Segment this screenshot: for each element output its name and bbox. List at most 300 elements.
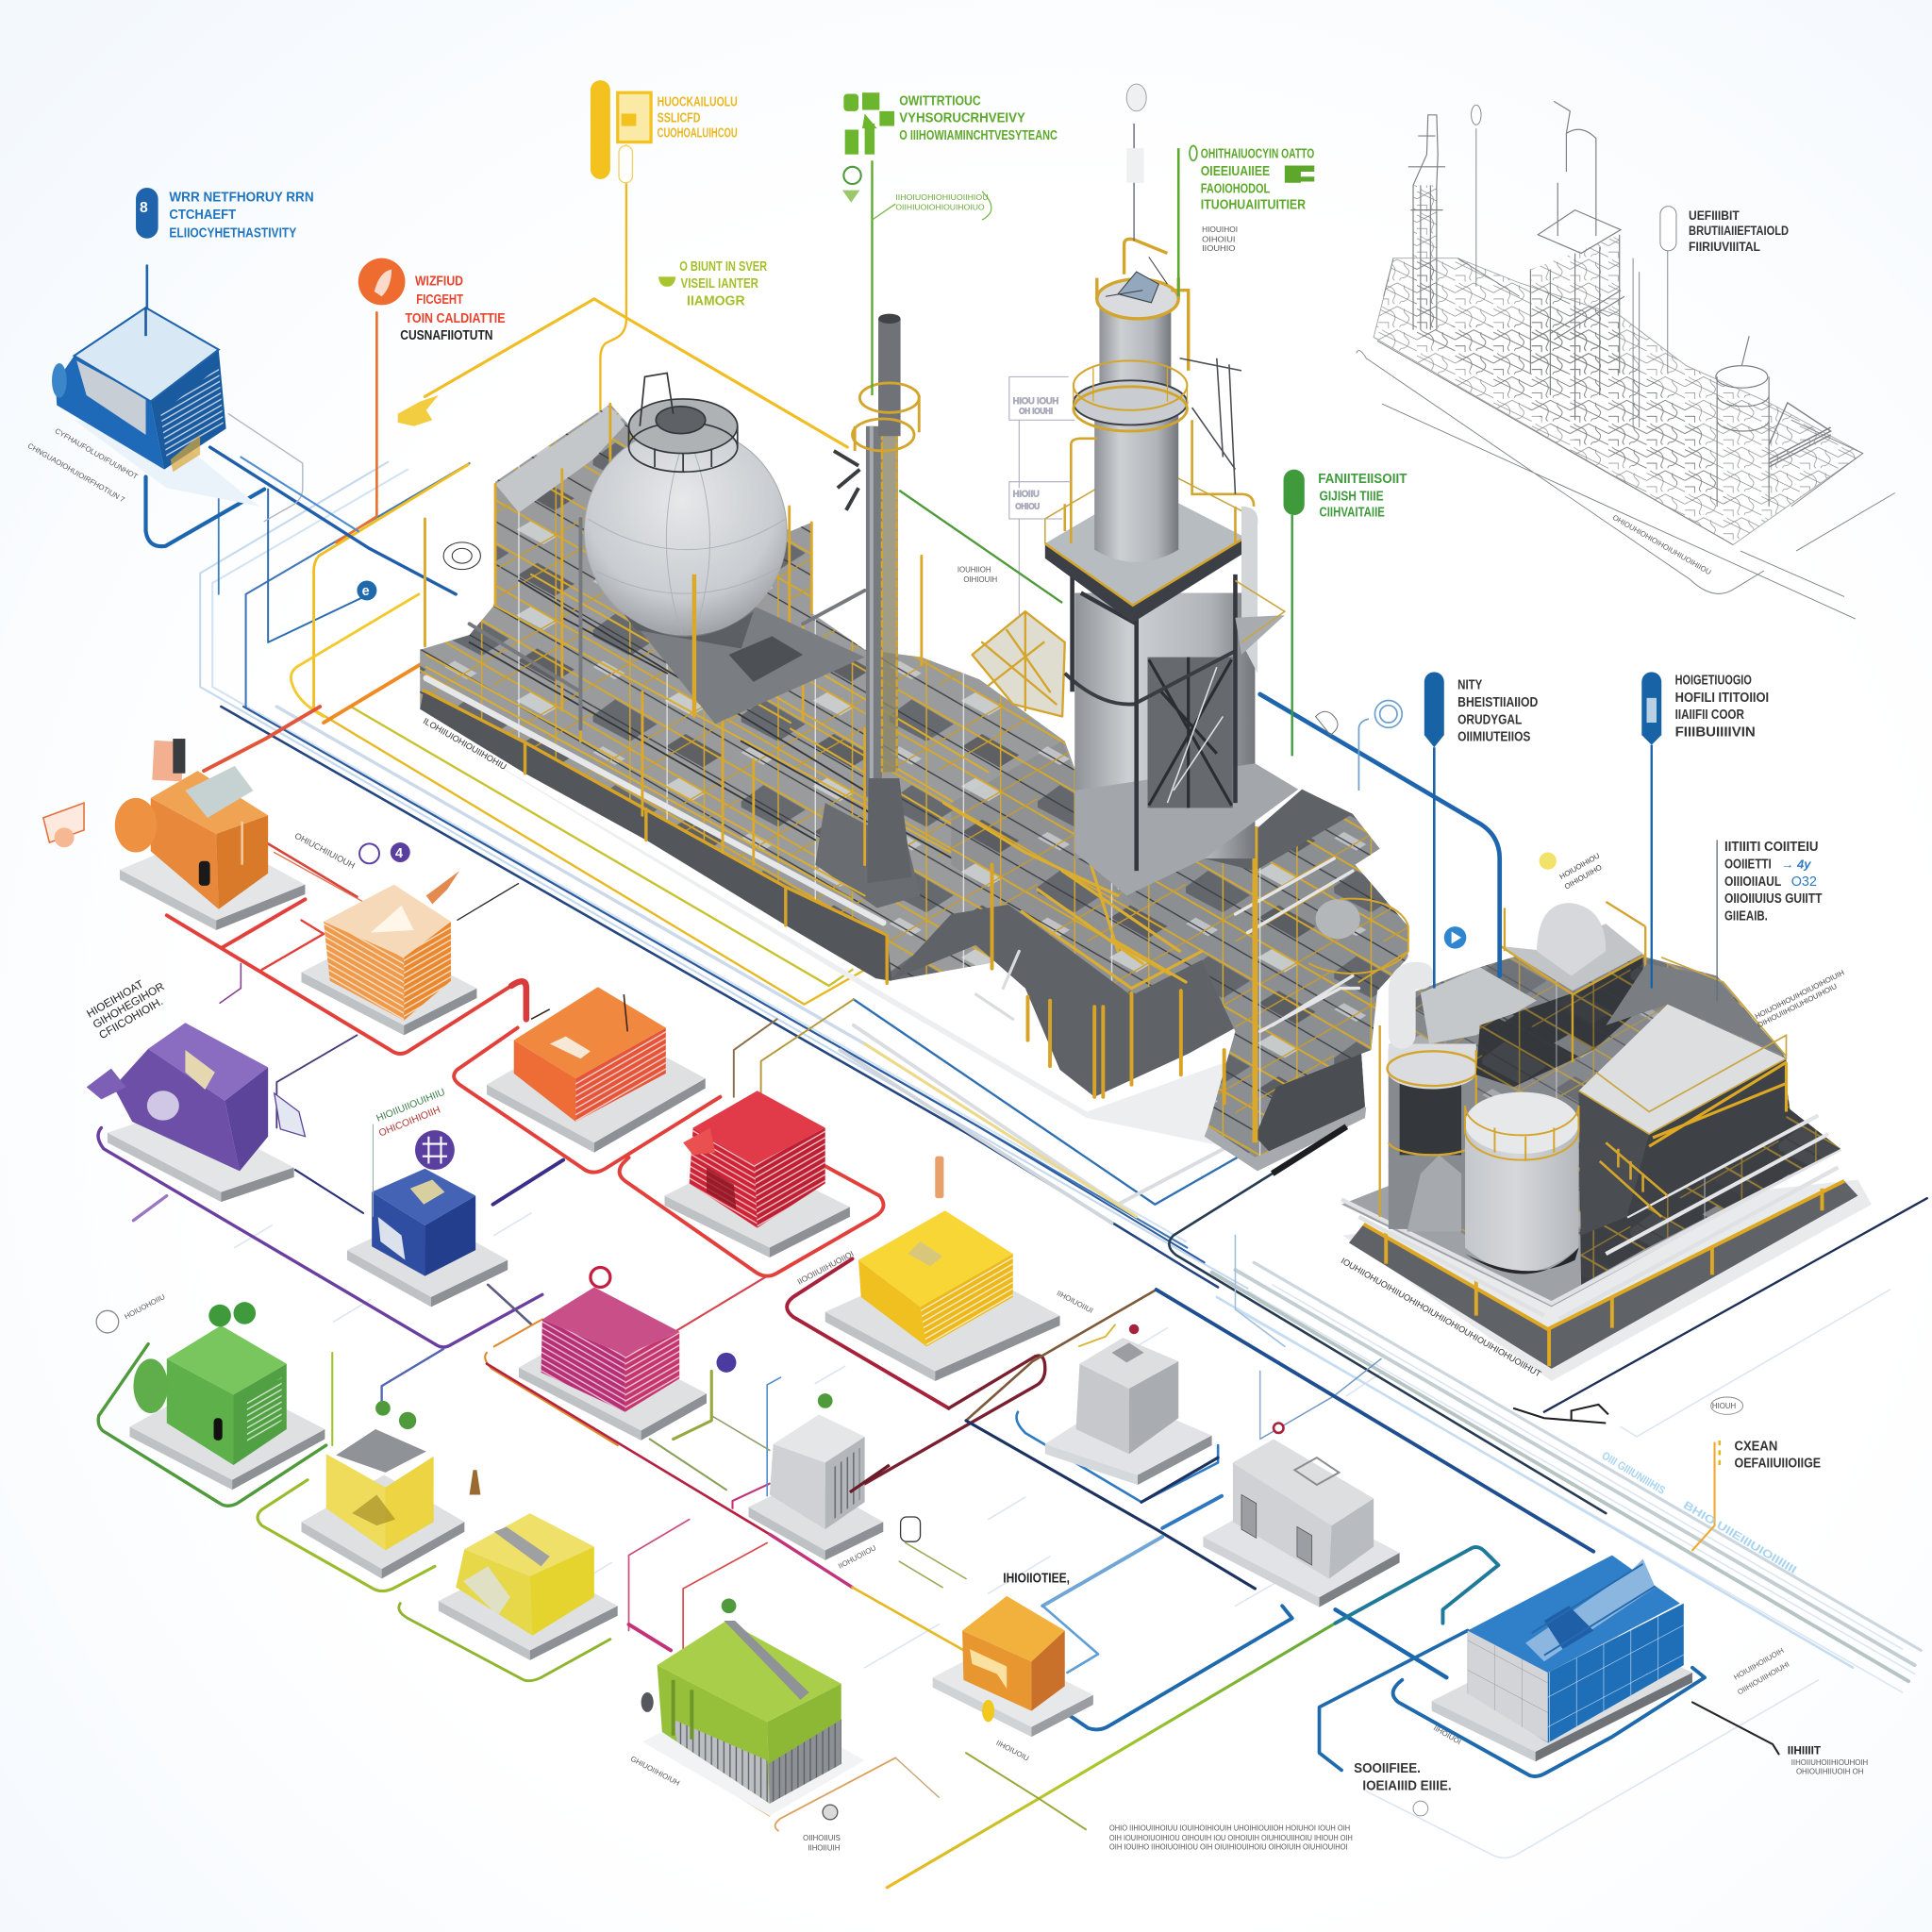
right unit: roof rails — [1578, 958, 1786, 1134]
icon: blue pill — [136, 188, 158, 239]
caption: near stack: OIHIOUIH — [963, 575, 997, 584]
icon: orange circle — [358, 258, 406, 305]
icon: pill square — [1647, 698, 1657, 723]
callout: blue top left — [136, 188, 314, 241]
pipes: upper yellow routes — [291, 146, 847, 723]
plant: upright posts — [425, 404, 922, 865]
flare stack — [834, 314, 919, 883]
machine: grey unit 3 — [1203, 1424, 1400, 1607]
text: blue scribble — [1781, 858, 1817, 890]
text: green block — [899, 92, 1058, 143]
tower: top ring — [1097, 239, 1189, 371]
text: blue pill block: BHEISTIIAIIOD — [1457, 694, 1538, 710]
text: tower block: OIEEIUAIIEE — [1201, 163, 1270, 179]
text: controls block: IITIIITI COIITEIU — [1724, 839, 1819, 855]
icon: green badges — [375, 1401, 416, 1429]
callout: controls text — [1717, 839, 1823, 1001]
wireframe: tank — [1716, 336, 1769, 507]
text: tower block — [1201, 146, 1314, 212]
diagonal blue labels: BHIO UIIEIIIUIOIIIIIII — [1681, 1499, 1798, 1576]
caption: purple unit: HIOEIHIOAT — [85, 978, 145, 1021]
sphere: skirt — [624, 611, 754, 648]
right unit: dark base — [1349, 1181, 1857, 1369]
caption: purple unit: CFIICOHIOIH. — [97, 995, 165, 1041]
caption: yellow unit: IIOOIIUIIHUOIIOI — [795, 1249, 856, 1287]
text: detail: IOEIAIIID EIIIE. — [1362, 1777, 1452, 1793]
icon: blue e badge — [357, 580, 376, 600]
text: controls block: OIIIOIIAUL — [1724, 874, 1781, 890]
caption: near stack: IOUHIIOH — [958, 565, 991, 574]
plant: long rails — [426, 531, 1062, 899]
right unit: white tank — [1465, 1126, 1578, 1273]
stack: cap — [878, 314, 901, 324]
callout: orange — [358, 258, 506, 343]
machine: orange unit 1 — [43, 739, 305, 930]
icon: black bracket arrow — [1513, 1405, 1608, 1424]
tower: side pipe — [1071, 420, 1254, 543]
right unit: roof side — [1627, 1058, 1786, 1217]
text: blue block: CTCHAEFT — [169, 207, 237, 223]
label: right small: IIHIIIIT — [1788, 1744, 1822, 1757]
sphere: front post — [692, 575, 696, 716]
riser — [1651, 745, 1653, 989]
text: yellow block — [658, 94, 738, 141]
icon: green blocks — [843, 92, 894, 155]
icon: yellow chevron — [398, 395, 439, 426]
icon: green bars — [1285, 165, 1314, 183]
text: tower block: ITUOHUAIITUITIER — [1201, 196, 1306, 212]
right unit: tank top — [1465, 1092, 1578, 1154]
text: green block: O IIIHOWIAMINCHTVESYTEANC — [899, 127, 1058, 143]
icon: sketch stamp — [1413, 1801, 1428, 1816]
mast — [1133, 124, 1135, 241]
machine: navy unit — [347, 1088, 508, 1307]
caption: grey unit 2: IIHOIUOIIUI — [1056, 1289, 1094, 1315]
wireframe: outer base — [1357, 351, 1895, 619]
plant: grey pipes — [470, 519, 865, 729]
text: blue block — [169, 189, 314, 241]
tower: deck edge — [1045, 538, 1245, 623]
plant: left lattice — [420, 404, 1087, 981]
plant: scaffold yellow — [943, 803, 1202, 989]
tower: left callout boxes: OH IOUHI — [1019, 408, 1053, 416]
wireframe: vertical risers — [1633, 258, 1640, 427]
plant: lower hull dark patch — [815, 803, 921, 908]
icon: green circle — [843, 167, 861, 184]
text: blue pill block — [1457, 677, 1538, 745]
right unit: backing structure — [1389, 924, 1786, 1235]
callout: tower green — [1178, 146, 1314, 296]
right unit: yellow beams — [1364, 1181, 1844, 1366]
riser — [1716, 840, 1718, 1001]
antenna above tower — [1126, 84, 1146, 241]
tower: deck rail — [1045, 460, 1245, 543]
callout: bottom text — [1354, 1760, 1452, 1816]
stack: ladder rails — [882, 432, 897, 772]
big blue riser — [1260, 694, 1500, 975]
right unit: deck — [1341, 1109, 1840, 1307]
icon: maroon badge — [1274, 1424, 1284, 1433]
icon: yellow block — [622, 113, 636, 126]
icon: blue pill — [1424, 672, 1444, 747]
icon: red badge — [591, 1268, 610, 1287]
wireframe: callout tube — [1660, 207, 1676, 251]
machine: orange cube — [933, 1570, 1093, 1763]
connector: green stack to tower — [899, 491, 1062, 603]
plant: right deck top — [1205, 790, 1353, 871]
right unit: roof — [1578, 1005, 1786, 1134]
machine: magenta unit — [519, 1268, 736, 1441]
wireframe: main tower — [1530, 101, 1621, 420]
caption: purple unit: GIHOHEGIHOR — [91, 980, 166, 1031]
plant: scaffold mesh — [973, 611, 1065, 716]
caption: plant: ILOHIIUIOHIOUIIHOHIU — [422, 716, 508, 772]
green riser — [1177, 148, 1179, 296]
text: tower block: OHITHAIUOCYIN OATTO — [1201, 146, 1314, 162]
callout: yellow green — [658, 258, 767, 308]
wireframe: callout stem — [1667, 251, 1669, 373]
caption: orange cube: IIHOIUOIU — [994, 1739, 1030, 1763]
callout: blue pill middle — [1424, 672, 1538, 989]
text: blue pill block: NITY — [1457, 677, 1482, 693]
callout: yellow top — [591, 80, 738, 183]
plant: white walkway band — [426, 678, 883, 923]
sphere: body — [584, 427, 787, 635]
text: lime block: VISEIL IANTER — [681, 275, 758, 291]
stack: upper pipe — [878, 319, 901, 436]
caption: lime unit: GHIUOIIHIOIUH — [629, 1755, 681, 1788]
icon: indigo badge — [716, 1353, 736, 1373]
icon: sketch bag — [901, 1517, 921, 1541]
pipes: maroon and blue network — [850, 1290, 1779, 1776]
icon: sketch badge — [823, 1805, 838, 1820]
right process unit — [1273, 902, 1872, 1381]
right unit: upper deck frame — [1501, 902, 1645, 1062]
plant: dark rails — [470, 580, 963, 865]
plant: right wing body — [1118, 790, 1408, 1158]
tower: deck — [1045, 486, 1245, 606]
icon: orange marker — [935, 1157, 943, 1198]
text: right pill block: IIAIIFII COOR — [1675, 707, 1744, 723]
right unit: tank shadow — [1465, 1248, 1578, 1274]
right unit: roof left side — [1578, 1091, 1649, 1235]
text: side block — [1318, 471, 1407, 520]
right unit: bent white pipe — [1402, 975, 1421, 1035]
wireframe: body overlay — [1408, 321, 1729, 507]
icon: yellow pill — [591, 80, 610, 179]
main plant — [420, 404, 1408, 1171]
text: side block: CIIHVAITAIIE — [1320, 504, 1385, 520]
right unit: left cylinder collar — [1389, 1043, 1476, 1090]
machine: orange unit 2 — [293, 831, 519, 1035]
text: lime block: IIAMOGR — [687, 292, 745, 308]
icon: green badge — [722, 1598, 736, 1613]
wireframe: platform edges — [1377, 258, 1863, 544]
text: controls block: GIIEAIB. — [1724, 908, 1768, 924]
text: grey note: IIOUHIO — [1202, 244, 1235, 253]
caption: lower note — [803, 1834, 841, 1853]
pipes: purple routes — [98, 963, 563, 1404]
tower: flare base — [1074, 763, 1298, 895]
text: exchange — [1734, 1438, 1821, 1472]
icon: orange blueprint — [43, 803, 84, 842]
tower: ring platform — [1074, 360, 1187, 431]
machine: grey unit 2 — [1045, 1289, 1212, 1485]
tower: lower deck — [1235, 615, 1285, 655]
icon: purple badges — [359, 842, 410, 863]
text: side block: GIJISH TIIIE — [1320, 488, 1384, 504]
distillation tower — [1009, 239, 1298, 895]
tower: rail lower — [1235, 580, 1285, 642]
caption: navy unit: OHICOIHIOIIH — [377, 1105, 442, 1139]
icon: bowl — [658, 276, 675, 287]
right unit: left cylinder rails — [1380, 1025, 1478, 1248]
wireframe: label: BRUTIIAIIEFTAIOLD — [1689, 224, 1789, 238]
right unit: machinery lattice under top — [1476, 958, 1643, 1087]
icon: yellow drop — [982, 1700, 994, 1722]
machine: red-orange unit — [487, 987, 706, 1153]
text: yellow block: HUOCKAILUOLU — [658, 94, 738, 110]
text: small green note — [872, 192, 991, 220]
icon: ball — [1126, 84, 1146, 111]
sphere: top cage — [629, 373, 738, 472]
text: grey note: HIOUIHOI — [1202, 225, 1238, 234]
caption: orange unit 2: OHIUCHIIUIOUH — [293, 831, 357, 871]
caption: lower note: OIIHOIIUIS — [803, 1834, 841, 1842]
right unit: thick black pipe — [1273, 1126, 1346, 1174]
caption: blue unit left: IIHOIUOI — [1432, 1724, 1462, 1746]
icon: green triangle — [842, 191, 859, 203]
right unit: yellow band — [1649, 1062, 1786, 1146]
right unit: backing lattice — [1389, 924, 1786, 1235]
tower: walkway band — [1065, 651, 1235, 705]
label: right small: OHIOUIHIIUOIH OH — [1796, 1767, 1864, 1775]
paragraph: bottom notes — [1109, 1824, 1353, 1851]
caption: near stack — [958, 565, 997, 584]
text: right pill block: FIIIBUIIIIVIN — [1675, 724, 1756, 740]
text: grey note: OIHOIUI — [1202, 236, 1235, 244]
icon: yellow panel — [618, 92, 651, 142]
text: green block: VYHSORUCRHVEIVY — [899, 110, 1025, 126]
tower: bracing panel — [1147, 658, 1233, 808]
icon: yellow badge: HOIUOIHIOU — [1558, 851, 1602, 881]
right unit: floor shadow — [1342, 1180, 1872, 1381]
diagonal blue labels: OIII GIIIUNIIIHIS — [1600, 1450, 1667, 1497]
icon: blue pill — [1641, 672, 1661, 745]
sketch note: HIOUH — [1712, 1402, 1737, 1410]
wireframe: tower hatch — [1530, 235, 1620, 373]
pipes: machine blue lines — [146, 266, 456, 594]
text: yellow block: SSLICFD — [658, 110, 701, 126]
text: side block: FANIITEIISOIIT — [1318, 471, 1407, 487]
machine: grey unit 1 — [749, 1393, 921, 1571]
tower: left callout boxes — [1009, 376, 1074, 618]
tower: left callout boxes: HIOU IOUH — [1013, 396, 1058, 406]
plant: right dome — [1316, 899, 1360, 939]
text: exchange: OEFAIIUIIOIIGE — [1734, 1456, 1821, 1472]
text: orange block: FICGEHT — [416, 291, 464, 308]
plant: soft floor shadow — [420, 719, 1260, 1149]
stack: lower pipe — [866, 426, 882, 797]
tower: mid cylinder — [1094, 408, 1178, 562]
tower: light braces — [1167, 667, 1223, 803]
paragraph: bottom notes: OIH IOUIHO IIHOIUOIHIOU OIH OIUIHIOUIHOIU OIHOIUIH OIUHIOUIHOI — [1109, 1841, 1348, 1851]
icon: mast sketch — [1126, 148, 1144, 183]
machine: yellow unit 1 — [795, 1157, 1060, 1381]
text: orange block — [400, 273, 506, 343]
text: source: SOOIIFIEE. — [1354, 1760, 1421, 1776]
caption: lower note: IIHOIIUIH — [808, 1844, 841, 1853]
right unit: silver rails — [1341, 1149, 1840, 1320]
icon: blue play badge — [1444, 926, 1466, 949]
text: right pill block: HOFILI ITITOIIOI — [1675, 690, 1769, 706]
right unit: roof rear deck — [1606, 963, 1786, 1057]
caption: blue unit right: HOIUIIHOIIUOIH — [1732, 1646, 1786, 1682]
right unit: inner cone — [1407, 1155, 1461, 1232]
text: controls block: OOIIETTI — [1724, 857, 1772, 873]
right unit: machinery under top — [1476, 958, 1643, 1087]
label: right small: IIHOIIUHOIIHIOUHOIH — [1791, 1758, 1869, 1767]
icon: orange drawing tag — [152, 741, 184, 781]
stack: ladder — [881, 432, 898, 772]
right unit: silver bars — [1606, 1115, 1828, 1254]
wireframe: left tower — [1408, 115, 1445, 330]
callout: green side — [1284, 470, 1407, 756]
machine: yellow unit 3 — [439, 1470, 618, 1660]
right unit: left cylinder — [1389, 1062, 1476, 1229]
caption: navy unit: HIOIIUIIOUIHIIU — [375, 1088, 447, 1124]
plant: right wing lattice — [1118, 790, 1408, 1158]
machine: blue unit bottom right — [1432, 1556, 1869, 1775]
right unit: machinery bank — [1578, 1083, 1840, 1285]
caption: blue unit: CHNGUAOIOHUIOIRFHOTIUN 7 — [26, 441, 126, 504]
plant: right lower rubble — [1255, 1054, 1365, 1158]
caption: right unit diagonal: HOIUOIHIOUIHOIUOIHOIUIH — [1754, 968, 1846, 1021]
tower: upper cylinder — [1099, 296, 1171, 402]
icon: green badges — [208, 1302, 256, 1326]
icon: purple badges: 4 — [395, 846, 403, 861]
text: blue scribble: → 4y — [1781, 858, 1811, 872]
text: blue pill block: ORUDYGAL — [1457, 711, 1522, 727]
icon: dark tag — [173, 739, 185, 774]
icon: blue e badge: e — [362, 584, 370, 599]
wireframe: tank side roof — [1769, 403, 1831, 467]
icon: valve cluster — [834, 451, 859, 510]
text: blue pill block: OIIMIUTEIIOS — [1457, 729, 1530, 745]
text: right pill block: HOIGETIUOGIO — [1675, 672, 1752, 688]
text: green block: OWITTRTIOUC — [899, 92, 981, 108]
text: orange block: CUSNAFIIOTUTN — [400, 327, 492, 343]
pipe: orange callout riser — [336, 312, 376, 542]
right unit: machinery lattice — [1578, 1083, 1840, 1285]
plant: thick post — [1253, 826, 1257, 1142]
plant: scaffold lattice — [951, 741, 1202, 995]
right unit: dome — [1537, 903, 1606, 975]
machine: purple unit — [85, 970, 305, 1202]
caption: grey unit 1: IIOHUOIIOU — [837, 1543, 878, 1571]
plant: silver pipes on right — [1235, 858, 1358, 1031]
text: yellow block: CUOHOALUIHCOU — [658, 125, 738, 141]
machine: lime unit — [629, 1598, 865, 1853]
icon: coil sketches — [1316, 700, 1402, 791]
wireframe: label: UEFIIIBIT — [1689, 208, 1740, 223]
wireframe: caption: OHIOUHIOHIOIHOIUHIUOIHIIOU — [1611, 513, 1713, 576]
plant: underside — [420, 691, 891, 981]
icon: yellow tick marks — [1719, 1441, 1721, 1465]
riser — [1433, 747, 1435, 989]
tower: top details — [1106, 257, 1167, 303]
icon: maroon badge — [1129, 1324, 1139, 1334]
pipes: red orange routes — [167, 707, 949, 1408]
caption: purple unit — [85, 970, 173, 1041]
text: blue scribble: O32 — [1791, 874, 1817, 890]
plant: dark hatch — [729, 636, 803, 682]
tower: braces — [1149, 658, 1232, 808]
icon: yellow tube — [619, 146, 632, 183]
plant: legs — [991, 865, 1224, 1103]
tower: right side drum — [1241, 507, 1257, 674]
machine: blue unit top left — [26, 308, 259, 507]
wireframe: left tower hatch — [1413, 185, 1437, 330]
paragraph: bottom notes: OIH IOUIHOIUOIHIOU OIHOUIH IOU OIHOIUIH OIUHIOUIIHOIU IHIOUH OIH — [1109, 1833, 1353, 1842]
wireframe: mast ball — [1472, 105, 1481, 125]
wireframe: long pipe — [1550, 291, 1624, 340]
text: blue block: ELIIOCYHETHASTIVITY — [169, 225, 296, 241]
sphere tank — [584, 373, 787, 716]
text: right pill block — [1675, 672, 1769, 740]
right unit: left cylinder windows — [1400, 1083, 1461, 1155]
callout: green top — [842, 92, 1058, 395]
text: blue block: WRR NETFHORUY RRN — [169, 189, 314, 205]
icon: ring — [1190, 146, 1197, 160]
plant: scaffold near tower — [973, 611, 1065, 716]
plant: dark floor under tower — [890, 890, 1235, 1097]
tower: left callout boxes: HIOIIU — [1013, 489, 1040, 498]
icon: orange cog — [55, 827, 75, 847]
tower: side instruments — [1180, 358, 1241, 494]
right unit: captions: IOUHIIOHUOIHIIUOHIHOIUHIIOHIOUHIOUIHIOHUOIIHUT — [1340, 1256, 1543, 1379]
text: tower block: FAOIOHODOL — [1201, 180, 1270, 196]
icon: yellow badge: OIHIOUIIHO — [1563, 863, 1604, 891]
tower: dark frame — [1073, 562, 1235, 871]
stack: yellow rings — [853, 383, 919, 451]
paragraph: bottom notes: OHIO IIHIOUIIHOIUU IOUIHOIHIOUIH UHOIHIOUIIOH HOIUHOI IOUH OIH — [1109, 1824, 1350, 1833]
machine: yellow unit 2 — [302, 1401, 464, 1578]
text: lime block: O BIUNT IN SVER — [679, 258, 767, 275]
plant: back raised deck — [495, 407, 625, 512]
right unit: tank rail — [1465, 1106, 1578, 1161]
caption: blue unit right — [1732, 1646, 1790, 1696]
tower: lower shell — [1074, 593, 1255, 858]
text: orange block: TOIN CALDIATTIE — [406, 310, 506, 326]
plant: grey slab — [1205, 1107, 1366, 1171]
right unit: stair — [1600, 1142, 1668, 1217]
icon: green pill — [1284, 470, 1305, 515]
text: lime block — [679, 258, 767, 308]
wireframe: centre mast — [1475, 128, 1477, 287]
caption: right unit diagonal: OIHIOUIIHOIUHIOUIHOIU — [1756, 982, 1839, 1029]
icon: sketch ring near plant — [443, 542, 480, 570]
icon: sketch head — [96, 1310, 119, 1333]
sphere: meridians — [588, 432, 786, 634]
plant: white stair — [975, 951, 1019, 1019]
icon: yellow badge — [1540, 851, 1604, 891]
stack: skirt — [867, 778, 911, 883]
plant: left section body — [420, 404, 1087, 981]
plant: deck under sphere — [629, 606, 865, 724]
machine: red unit — [664, 1091, 850, 1257]
machine: green unit — [96, 1292, 325, 1490]
